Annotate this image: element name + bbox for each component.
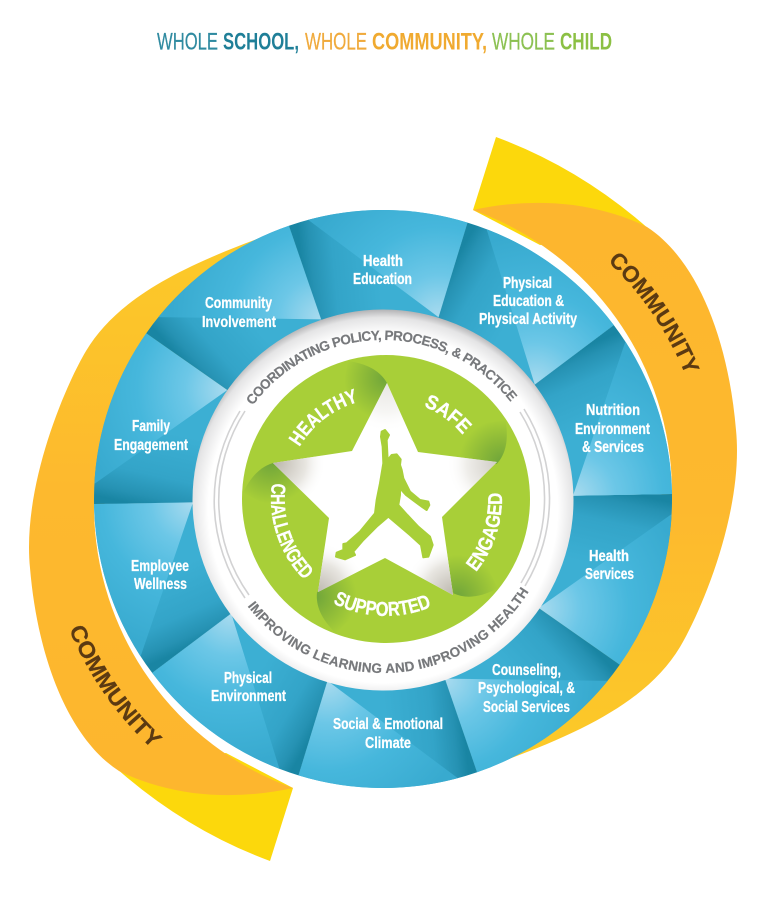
wheel segment: nutrition environment and services: Environment	[575, 421, 650, 438]
label: community upper right: COMMUNITY	[611, 254, 700, 370]
wheel segment: nutrition environment and services	[383, 325, 716, 635]
title: WHOLE	[305, 28, 367, 56]
wheel segment: physical education and activity	[383, 223, 630, 549]
wheel segment: counseling: Social Services	[483, 699, 570, 716]
double arc: left	[214, 411, 249, 598]
wheel segment: social and emotional climate: Climate	[365, 735, 411, 752]
ribbon word: safe: SAFE	[425, 395, 472, 434]
title	[157, 28, 612, 56]
wheel segment: family engagement	[91, 329, 383, 504]
title: WHOLE	[157, 28, 218, 56]
double arc: right	[520, 409, 550, 586]
wheel segment: nutrition environment and services: Nutrition	[586, 402, 640, 419]
white center disc	[192, 310, 574, 690]
wheel segment: employee wellness: Wellness	[134, 576, 187, 593]
title: CHILD	[560, 28, 612, 56]
wheel segment: counseling	[286, 499, 620, 804]
wheel segment: physical education and activity: Physical	[503, 275, 552, 292]
wheel segment: health services	[383, 494, 675, 669]
wheel segment: physical environment: Physical	[224, 670, 272, 687]
wheel segment: physical education and activity: Education &	[493, 293, 564, 310]
ribbon folds	[241, 361, 518, 638]
wheel segment: health services: Services	[585, 566, 634, 583]
wheel segment: employee wellness: Employee	[131, 558, 189, 575]
title: COMMUNITY,	[372, 28, 487, 56]
wheel segment: nutrition environment and services: & Services	[582, 439, 644, 456]
wheel segment: community involvement	[146, 194, 480, 499]
wheel segment: physical environment	[136, 449, 383, 775]
wheel segment: social and emotional climate: Social & Emotional	[333, 716, 443, 733]
wheel segment: employee wellness	[50, 363, 383, 673]
ribbon word: supported: SUPPORTED	[334, 592, 430, 616]
ribbon word: challenged: CHALLENGED	[270, 484, 312, 578]
wheel segment: physical education and activity: Physical Activity	[479, 311, 577, 328]
title: SCHOOL,	[223, 28, 299, 56]
title: WHOLE	[492, 28, 555, 56]
wheel segment: community involvement: Involvement	[202, 314, 276, 331]
label: community lower left: COMMUNITY	[71, 626, 163, 745]
ribbon word: engaged: ENGAGED	[466, 493, 502, 572]
ribbon word: healthy: HEALTHY	[288, 388, 354, 446]
white star	[273, 383, 497, 595]
community band: lower left	[29, 235, 366, 861]
wheel segment: health education: Education	[353, 271, 412, 288]
wheel segment: physical environment: Environment	[211, 688, 286, 705]
wheel segment: family engagement: Engagement	[114, 437, 188, 454]
wheel segment: health education	[289, 170, 544, 499]
wheel segment: community involvement: Community	[205, 295, 272, 312]
wheel segment: counseling: Psychological, &	[478, 680, 575, 697]
wheel segment: health education: Health	[363, 253, 403, 270]
wheel segment: health services: Health	[589, 548, 629, 565]
ring text: coordinating policy: COORDINATING POLICY, PROCESS, & PRACTICE	[247, 330, 518, 404]
jumping figure silhouette	[336, 430, 433, 559]
green circle	[242, 355, 530, 643]
community band: upper right	[400, 137, 737, 763]
wheel segment: family engagement: Family	[132, 418, 170, 435]
wheel segment: counseling: Counseling,	[492, 662, 561, 679]
wheel segment: social and emotional climate	[222, 499, 477, 828]
ring text: improving learning: IMPROVING LEARNING AND IMPROVING HEALTH	[248, 586, 528, 674]
